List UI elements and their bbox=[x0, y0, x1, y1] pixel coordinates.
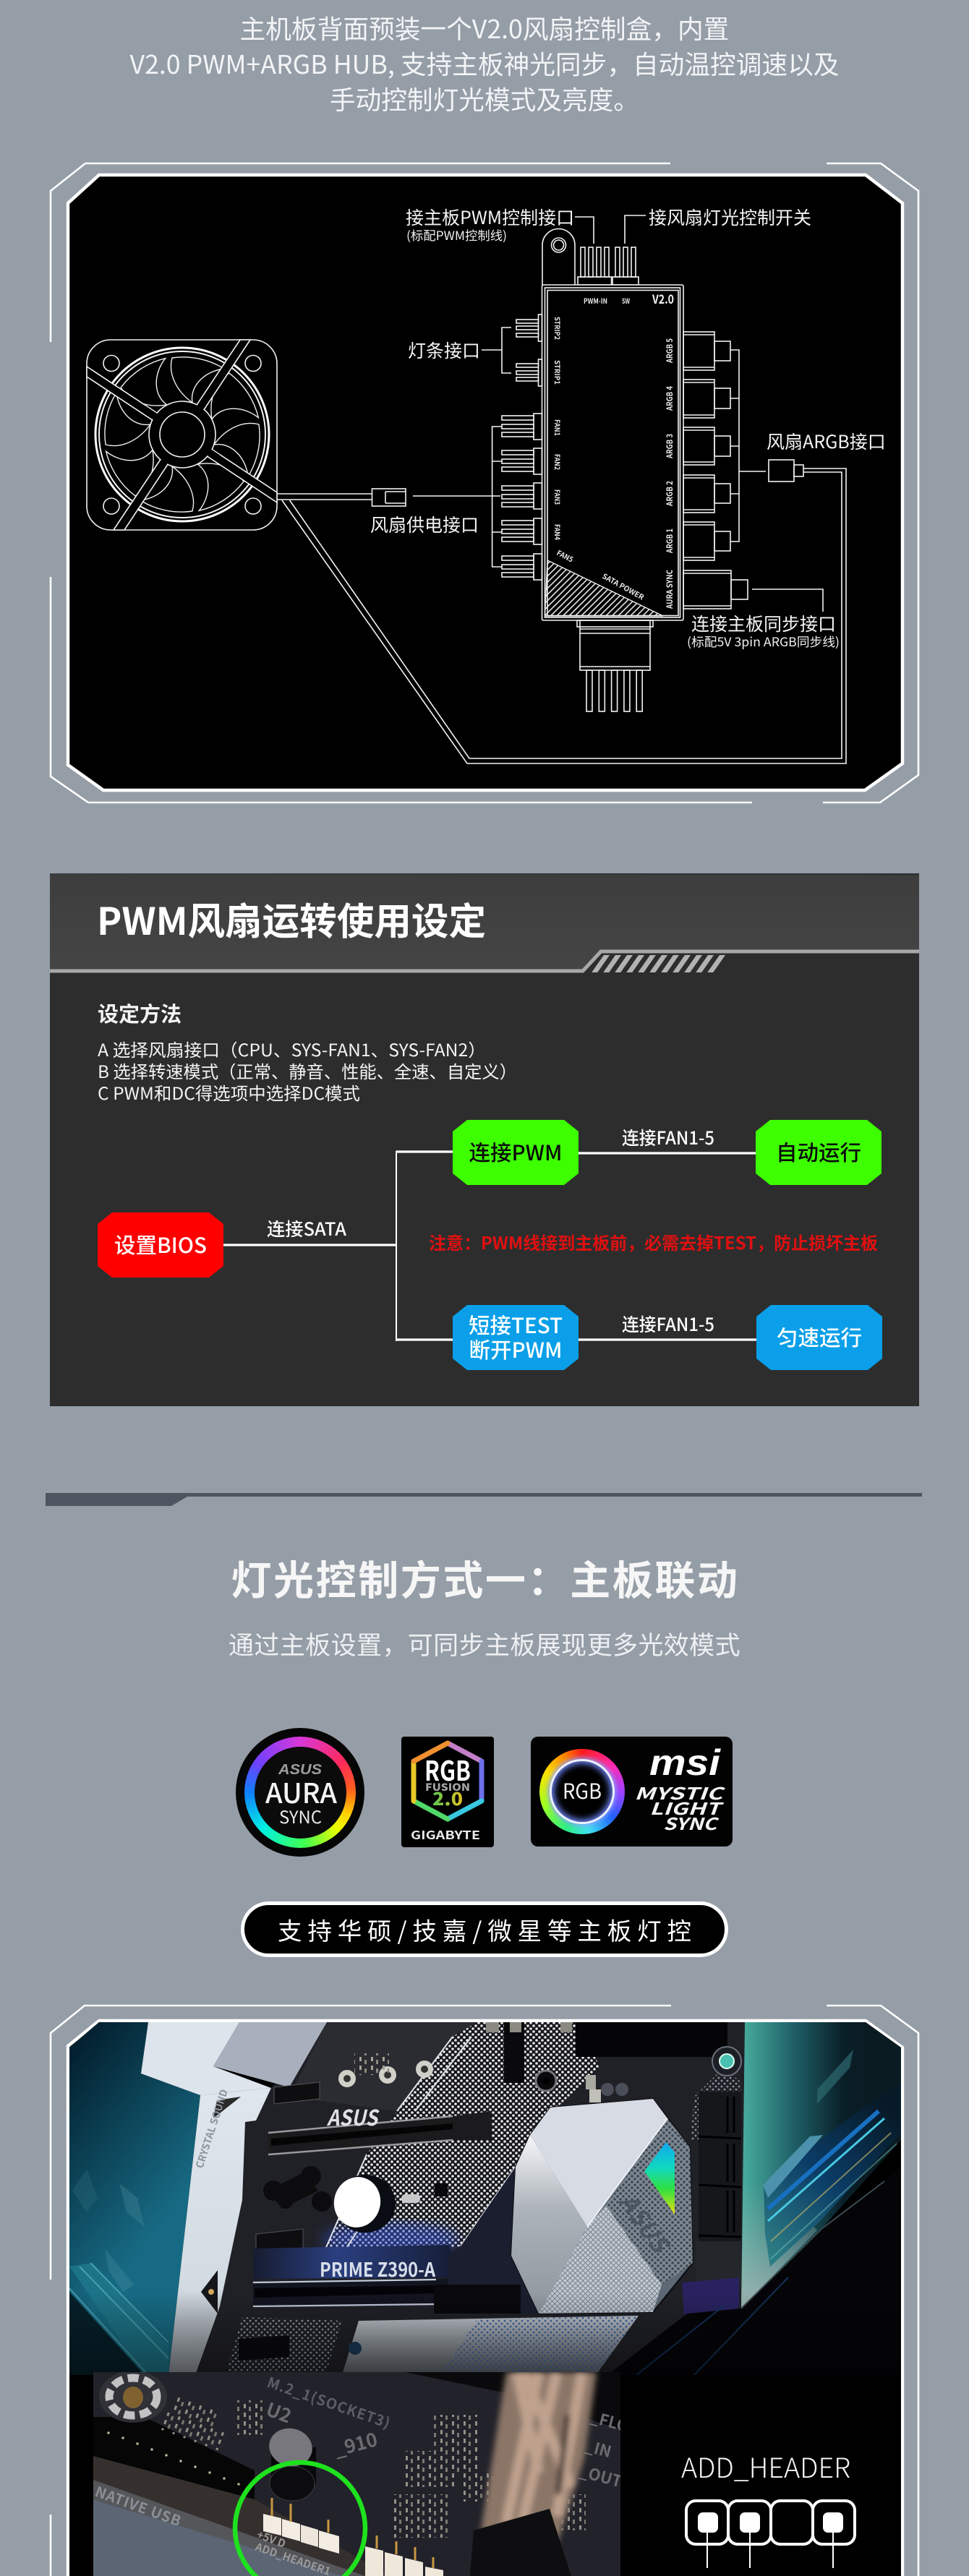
header band bbox=[50, 873, 919, 971]
hub silk labels: STRIP2 bbox=[552, 317, 563, 340]
node: short TEST: 断开PWM bbox=[469, 1334, 562, 1364]
logo: Gigabyte RGB Fusion: 2.0 bbox=[432, 1785, 463, 1810]
long cable bbox=[282, 468, 846, 763]
white shield: CRYSTAL SOUND bbox=[192, 2087, 231, 2170]
top components bbox=[338, 2022, 741, 2102]
silk text: _IN bbox=[583, 2434, 614, 2462]
screw bbox=[99, 2371, 167, 2423]
label: PWM port: (标配PWM控制线) bbox=[406, 226, 507, 244]
PCIe slots bbox=[239, 2082, 492, 2361]
intro text: 手动控制灯光模式及亮度。 bbox=[330, 80, 639, 117]
left teal backdrop bbox=[69, 2022, 200, 2375]
hub body bbox=[542, 285, 683, 620]
PWM and SW pins bbox=[578, 247, 639, 285]
rainbow ring bbox=[244, 1737, 356, 1848]
hub silk labels: STRIP1 bbox=[552, 360, 563, 385]
white glow ring bbox=[552, 1761, 612, 1822]
logo text: msi bbox=[649, 1742, 721, 1783]
link labels: 连接FAN1-5 bbox=[622, 1124, 714, 1150]
hub silk labels: ARGB 2 bbox=[664, 481, 675, 507]
ARGB connectors bbox=[683, 332, 803, 560]
solder pads bbox=[159, 2397, 586, 2538]
hub silk labels: ARGB 4 bbox=[664, 386, 675, 411]
node: auto run bbox=[756, 1120, 882, 1185]
mounting tab bbox=[542, 228, 575, 285]
hub silk labels: FAN4 bbox=[552, 524, 563, 540]
silk text: +5V D bbox=[255, 2527, 288, 2551]
hub silk labels: FAN2 bbox=[552, 454, 563, 470]
logo: ASUS Aura Sync bbox=[236, 1728, 364, 1857]
right teal backdrop bbox=[741, 2022, 901, 2308]
settings method bbox=[98, 998, 517, 1105]
hub silk labels: FAN5 bbox=[555, 547, 576, 565]
intro text: V2.0 PWM+ARGB HUB, 支持主板神光同步，自动温控调速以及 bbox=[130, 45, 839, 82]
label: board sync port: 连接主板同步接口 bbox=[691, 610, 836, 636]
inner frame bbox=[68, 175, 902, 790]
logo: Gigabyte RGB Fusion: GIGABYTE bbox=[411, 1826, 480, 1843]
outer frame bbox=[51, 163, 918, 803]
aura sync connector bbox=[683, 570, 823, 612]
logo text: SYNC bbox=[663, 1810, 720, 1835]
pin diagram bbox=[681, 2446, 855, 2568]
node: auto run: 自动运行 bbox=[776, 1137, 861, 1167]
hub silk labels: V2.0 bbox=[652, 289, 674, 307]
silk text: M.2_1(SOCKET3) bbox=[265, 2371, 394, 2433]
node: connect PWM: 连接PWM bbox=[469, 1137, 562, 1167]
label: strip port: 灯条接口 bbox=[408, 337, 480, 363]
settings method: B 选择转速模式（正常、静音、性能、全速、自定义） bbox=[98, 1058, 517, 1083]
hub silk labels: FAN1 bbox=[552, 419, 563, 436]
hub silk labels: FAN3 bbox=[552, 489, 563, 505]
logo: Gigabyte RGB Fusion bbox=[401, 1737, 494, 1847]
header stripes bbox=[588, 955, 727, 972]
inner frame bbox=[68, 2021, 902, 2576]
logo text bbox=[563, 1742, 726, 1835]
node: constant speed bbox=[756, 1305, 882, 1370]
logo text: RGB bbox=[563, 1775, 602, 1805]
board model: PRIME Z390-A bbox=[320, 2254, 436, 2282]
hub silk labels: PWM-IN bbox=[584, 295, 607, 306]
SATA connector bbox=[577, 620, 653, 711]
SATA hatch bbox=[545, 560, 663, 616]
motherboard photo bbox=[69, 2022, 901, 2576]
section heading: 灯光控制方式一：主板联动 bbox=[231, 1549, 740, 1607]
panel: PWM settings bbox=[50, 873, 919, 1406]
coin battery bbox=[329, 2173, 448, 2233]
logo text bbox=[265, 1762, 337, 1828]
node: short TEST bbox=[453, 1305, 579, 1370]
silk text: NATIVE USB bbox=[93, 2480, 185, 2531]
intro text: 主机板背面预装一个V2.0风扇控制盒，内置 bbox=[240, 9, 729, 46]
capacitor bbox=[269, 2428, 316, 2502]
green highlight ring bbox=[235, 2462, 365, 2576]
node: short TEST: 短接TEST bbox=[469, 1309, 563, 1340]
hub silk labels: ARGB 3 bbox=[664, 434, 675, 459]
USB header bbox=[93, 2417, 255, 2499]
logo text: LIGHT bbox=[649, 1795, 724, 1820]
white headers bbox=[263, 2498, 443, 2576]
lower plate bbox=[342, 2316, 639, 2375]
silk text: _OUT bbox=[577, 2459, 625, 2492]
support pill bbox=[243, 1903, 726, 1955]
black lower area bbox=[636, 2375, 696, 2376]
board logo: ASUS bbox=[326, 2100, 380, 2132]
node: set BIOS: 设置BIOS bbox=[114, 1229, 207, 1259]
link labels: 连接SATA bbox=[267, 1215, 346, 1241]
label: fan light switch: 接风扇灯光控制开关 bbox=[649, 204, 811, 230]
section subheading: 通过主板设置，可同步主板展现更多光效模式 bbox=[229, 1625, 740, 1662]
node: constant speed: 匀速运行 bbox=[777, 1322, 862, 1352]
hub silk labels: SW bbox=[622, 295, 630, 306]
fan power cable and connector bbox=[277, 489, 500, 506]
heatsink bbox=[511, 2099, 693, 2314]
heatsink: ASUS bbox=[612, 2185, 680, 2261]
node: connect PWM bbox=[453, 1120, 579, 1185]
inset header photo bbox=[93, 2371, 632, 2576]
heading: PWM风扇运转使用设定 bbox=[97, 891, 486, 946]
support pill: 支持华硕/技嘉/微星等主板灯控 bbox=[278, 1912, 691, 1947]
board edge bbox=[93, 2456, 390, 2576]
pin diagram: ADD_HEADER bbox=[681, 2446, 850, 2486]
icon: fan bbox=[87, 340, 277, 530]
hexagon bbox=[414, 1743, 482, 1819]
outer frame bbox=[51, 2006, 918, 2576]
warning note: 注意：PWM线接到主板前，必需去掉TEST，防止损坏主板 bbox=[429, 1229, 878, 1254]
silk text: U2 bbox=[262, 2395, 296, 2429]
silk text: _910 bbox=[330, 2425, 380, 2462]
logo: MSI Mystic Light Sync bbox=[531, 1737, 733, 1847]
label: fan light switch bbox=[625, 204, 811, 244]
fan connectors bbox=[492, 414, 542, 580]
navy panel and SATA bbox=[434, 2092, 741, 2316]
label: board sync port bbox=[687, 610, 840, 650]
logo text: SYNC bbox=[279, 1803, 322, 1828]
panel: motherboard photo bbox=[51, 2006, 918, 2576]
section divider bbox=[46, 1493, 922, 1506]
hub silk labels: ARGB 5 bbox=[664, 338, 675, 364]
hub silk labels: ARGB 1 bbox=[664, 529, 675, 554]
hub silk labels: AURA SYNC bbox=[664, 570, 675, 609]
ring centre bbox=[255, 1747, 346, 1838]
hub silk labels: SATA POWER bbox=[601, 570, 646, 602]
hexagon text: RGB bbox=[424, 1749, 471, 1789]
logo: Gigabyte RGB Fusion: FUSION bbox=[425, 1780, 470, 1794]
settings method: A 选择风扇接口（CPU、SYS-FAN1、SYS-FAN2） bbox=[98, 1036, 486, 1061]
silk text: _FLO bbox=[588, 2405, 632, 2437]
header accent line bbox=[50, 951, 919, 971]
logo text: ASUS bbox=[278, 1762, 323, 1778]
silk text bbox=[93, 2371, 632, 2576]
link labels: 连接FAN1-5 bbox=[622, 1311, 714, 1337]
white shield bbox=[141, 2022, 327, 2375]
panel: wiring diagram bbox=[51, 163, 918, 803]
logo text: MYSTIC bbox=[634, 1780, 725, 1805]
label: PWM port bbox=[406, 204, 594, 244]
rainbow ring bbox=[539, 1749, 625, 1834]
label: fan power: 风扇供电接口 bbox=[370, 511, 479, 537]
capacitors bbox=[263, 2166, 332, 2212]
board base bbox=[168, 2022, 745, 2375]
cable bundle bbox=[481, 2372, 597, 2545]
label: fan ARGB port: 风扇ARGB接口 bbox=[767, 428, 886, 454]
perforated fields bbox=[226, 2022, 741, 2375]
intro text bbox=[130, 9, 839, 117]
strip connectors bbox=[482, 314, 542, 386]
node: set BIOS bbox=[98, 1212, 223, 1278]
header outline bbox=[686, 2501, 855, 2544]
label: board sync port: (标配5V 3pin ARGB同步线) bbox=[687, 632, 840, 650]
lower right darkness bbox=[612, 2306, 745, 2375]
settings method: 设定方法 bbox=[98, 998, 182, 1028]
link labels bbox=[267, 1124, 714, 1337]
pin leads bbox=[707, 2533, 833, 2568]
pin markers bbox=[698, 2512, 843, 2533]
logo text: AURA bbox=[265, 1771, 337, 1811]
connector lines bbox=[223, 1152, 756, 1340]
label: PWM port: 接主板PWM控制接口 bbox=[406, 204, 574, 230]
hub silk labels bbox=[552, 289, 675, 609]
controller hub bbox=[482, 228, 823, 711]
settings method: C PWM和DC得选项中选择DC模式 bbox=[98, 1079, 360, 1105]
